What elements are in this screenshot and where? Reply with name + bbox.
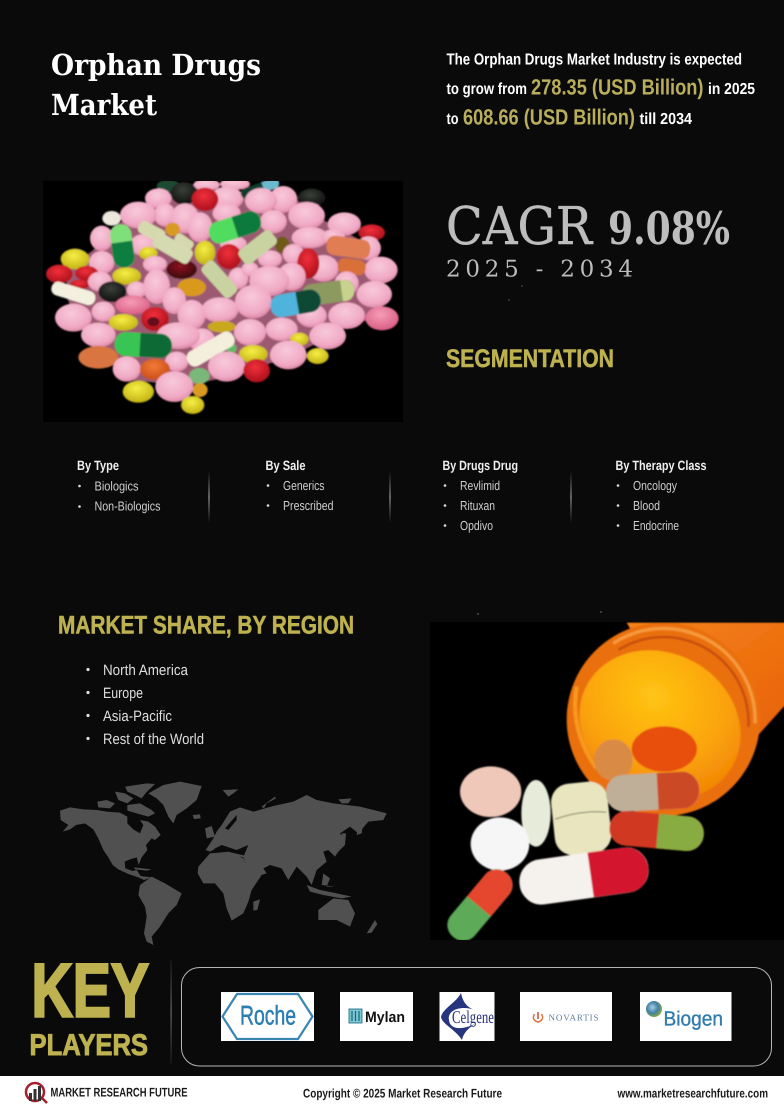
- market growth summary: 278.35 (USD Billion): [531, 74, 704, 100]
- region list: Rest of the World: [103, 731, 204, 748]
- logo: Mylan: [340, 992, 413, 1041]
- region list: [86, 662, 204, 748]
- market growth summary: till 2034: [640, 111, 692, 128]
- logo: Celgene: Celgene: [452, 1007, 494, 1027]
- region list: Asia-Pacific: [103, 708, 172, 725]
- footer logo icon: [26, 1083, 47, 1103]
- segment: by drugs drug: By Drugs Drug: [442, 458, 518, 473]
- segment: by drugs drug: [442, 458, 518, 533]
- segment: by drugs drug: Rituxan: [460, 498, 495, 513]
- market growth summary: to: [446, 111, 459, 128]
- segment: by type: By Type: [77, 458, 119, 473]
- segmentation heading: SEGMENTATION: [446, 345, 614, 373]
- title: Market: [51, 88, 158, 122]
- CAGR figure: [446, 197, 730, 282]
- title: Orphan Drugs: [51, 48, 261, 82]
- segment: by therapy class: Oncology: [633, 478, 677, 493]
- segment: by type: Biologics: [94, 478, 139, 494]
- segment: by type: Non-Biologics: [94, 498, 161, 514]
- logo: Mylan: Mylan: [365, 1009, 405, 1026]
- segment: by therapy class: By Therapy Class: [616, 458, 706, 473]
- footer: Copyright © 2025 Market Research Future: [303, 1086, 502, 1100]
- logo: Biogen: [640, 992, 732, 1041]
- logo: Novartis: [520, 992, 612, 1041]
- segment: by sale: Prescribed: [283, 498, 334, 513]
- CAGR figure: CAGR: [446, 197, 594, 257]
- segment: by type: [77, 458, 161, 514]
- market share heading: MARKET SHARE, BY REGION: [58, 612, 354, 640]
- segment: by therapy class: [616, 458, 706, 533]
- image: spilled pill bottle: [430, 621, 784, 947]
- market growth summary: in 2025: [708, 81, 755, 98]
- logo: Roche: [221, 992, 314, 1041]
- world map: [60, 782, 387, 945]
- logo: Celgene: [440, 992, 494, 1041]
- segment: by therapy class: Blood: [633, 498, 660, 513]
- image: pile of pills: [43, 176, 403, 422]
- logo: Roche: Roche: [240, 1000, 296, 1030]
- title: [51, 48, 261, 122]
- footer: [0, 1076, 784, 1108]
- segment: by drugs drug: Opdivo: [460, 518, 493, 533]
- market growth summary: 608.66 (USD Billion): [463, 104, 635, 130]
- key players panel: [182, 968, 772, 1066]
- segment: by sale: By Sale: [266, 458, 306, 473]
- CAGR figure: 9.08%: [608, 202, 730, 255]
- key players heading: [30, 948, 149, 1062]
- CAGR figure: 2025 - 2034: [446, 256, 633, 282]
- segment: by therapy class: Endocrine: [633, 518, 679, 533]
- logo: Novartis: NOVARTIS: [548, 1012, 598, 1022]
- segment: by drugs drug: Revlimid: [460, 478, 500, 493]
- segment: by sale: [266, 458, 334, 513]
- key players heading: PLAYERS: [30, 1029, 148, 1062]
- region list: Europe: [103, 685, 143, 702]
- stray specks: [477, 285, 602, 615]
- segment: by sale: Generics: [283, 478, 325, 493]
- market growth summary: [446, 52, 755, 130]
- key players heading: KEY: [32, 948, 149, 1034]
- region list: North America: [103, 662, 189, 679]
- market growth summary: to grow from: [446, 81, 527, 98]
- logo: Biogen: Biogen: [664, 1008, 723, 1030]
- footer: MARKET RESEARCH FUTURE: [50, 1086, 188, 1100]
